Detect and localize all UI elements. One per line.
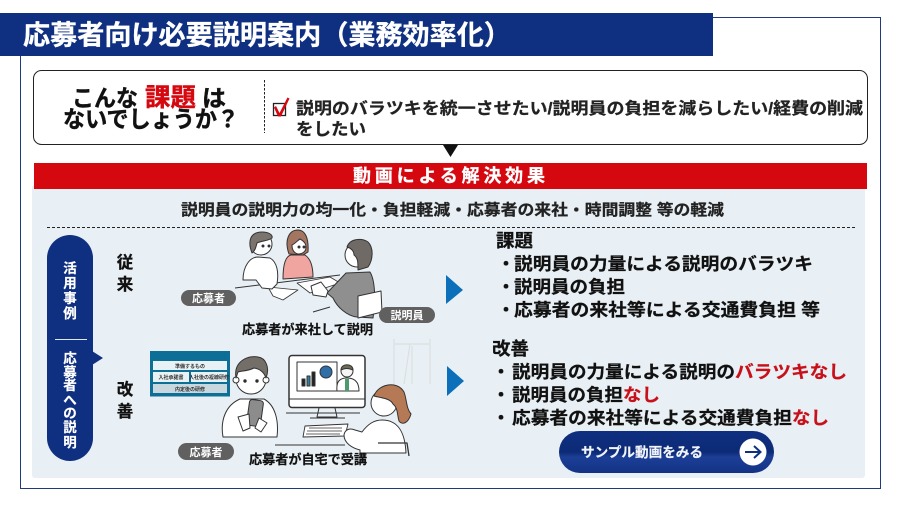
side pill: use case: 事: [63, 290, 77, 306]
label pill: explainer: [379, 307, 435, 323]
text: improvements: [492, 339, 847, 428]
label pill: applicant: [181, 290, 236, 306]
icon: red checkbox: [274, 98, 290, 116]
side pill: use case: 募: [63, 364, 77, 380]
text: challenges: [496, 231, 820, 320]
side pill: use case: 応: [63, 351, 77, 366]
panel: challenge box: [34, 70, 868, 144]
label: conventional: 来: [117, 275, 134, 294]
panel: solution background: [32, 185, 865, 478]
side pill: use case: 明: [63, 435, 77, 450]
challenge heading: ないでしょうか？: [63, 106, 239, 132]
title banner: 応募者向け必要説明案内（業務効率化）: [23, 20, 511, 50]
challenge heading: [63, 84, 239, 132]
side pill: use case: 者: [63, 377, 77, 393]
text: improvements: なし: [792, 408, 829, 428]
button: sample video: サンプル動画をみる: [581, 444, 703, 460]
label pill: applicant: [178, 443, 234, 460]
illustration: applicant with smartphone: [222, 357, 277, 437]
challenge heading: は: [202, 85, 226, 111]
text: improvements: 応募者の来社等による交通費負担: [512, 408, 792, 428]
arrow: down triangle: [443, 145, 458, 157]
label pill: applicant: 応募者: [192, 291, 225, 305]
illustration: preparation sheet: [150, 351, 230, 396]
text: improvements: ・: [492, 408, 510, 428]
side pill: use case: 例: [63, 306, 77, 321]
text: improvements: 改善: [492, 339, 529, 359]
text: challenges: 応募者の来社等による交通費負担 等: [514, 300, 820, 320]
text: improvements: ・: [492, 385, 510, 405]
text: challenges: ・: [497, 277, 515, 297]
caption: at home: 応募者が自宅で受講: [249, 452, 367, 467]
illustration: preparation sheet: 入社後の複線研修: [189, 374, 229, 381]
label: improved: 改: [117, 379, 134, 399]
label: improved: [117, 379, 134, 421]
illustration: preparation sheet: 入社承諾書: [158, 374, 184, 381]
text: challenges: ・: [497, 300, 515, 320]
arrow: bottom blue: [447, 366, 464, 396]
caption: visit: 応募者が来社して説明: [242, 322, 373, 337]
icon: faint window: [394, 339, 430, 384]
side pill: use case: [47, 235, 103, 461]
side pill: use case: 説: [63, 419, 77, 435]
challenge text: 説明のバラツキを統一させたい/説明員の負担を減らしたい/経費の削減: [296, 99, 864, 118]
text: challenges: 説明員の力量による説明のバラツキ: [514, 254, 813, 274]
challenge text: をしたい: [296, 120, 366, 139]
red heading bar: [34, 163, 867, 189]
title banner: [0, 13, 713, 56]
challenge heading: こんな: [72, 85, 138, 111]
button: sample video: [559, 431, 774, 473]
text: improvements: なし: [623, 385, 660, 405]
text: improvements: ・: [492, 362, 510, 382]
label pill: applicant: 応募者: [190, 445, 222, 459]
side pill: use case: の: [63, 406, 77, 421]
text: challenges: 課題: [496, 231, 533, 251]
label pill: explainer: 説明員: [390, 308, 424, 322]
arrow: top blue: [446, 275, 463, 304]
side pill: use case: 活: [63, 260, 77, 276]
side pill: use case: へ: [63, 393, 77, 408]
challenge heading: 課題: [145, 84, 196, 112]
icon: arrow circle: [740, 438, 766, 466]
label: conventional: [117, 253, 134, 294]
illustration: preparation sheet: 内定後の研修: [175, 386, 205, 393]
label: improved: 善: [117, 402, 133, 421]
text: improvements: 説明員の負担: [512, 385, 623, 405]
label: conventional: 従: [117, 253, 134, 272]
illustration: online viewing at home: [275, 356, 411, 456]
challenge text: [296, 99, 864, 139]
text: challenges: ・: [497, 254, 515, 274]
solution summary: 説明員の説明力の均一化・負担軽減・応募者の来社・時間調整 等の軽減: [181, 200, 725, 219]
side pill: use case: 用: [63, 276, 77, 291]
red heading bar: 動画による解決効果: [353, 166, 545, 186]
text: improvements: バラツキなし: [735, 362, 847, 382]
illustration: preparation sheet: 準備するもの: [175, 363, 205, 370]
text: challenges: 説明員の負担: [514, 277, 625, 297]
illustration: visit to office: [235, 230, 382, 318]
text: improvements: 説明員の力量による説明の: [512, 362, 735, 382]
